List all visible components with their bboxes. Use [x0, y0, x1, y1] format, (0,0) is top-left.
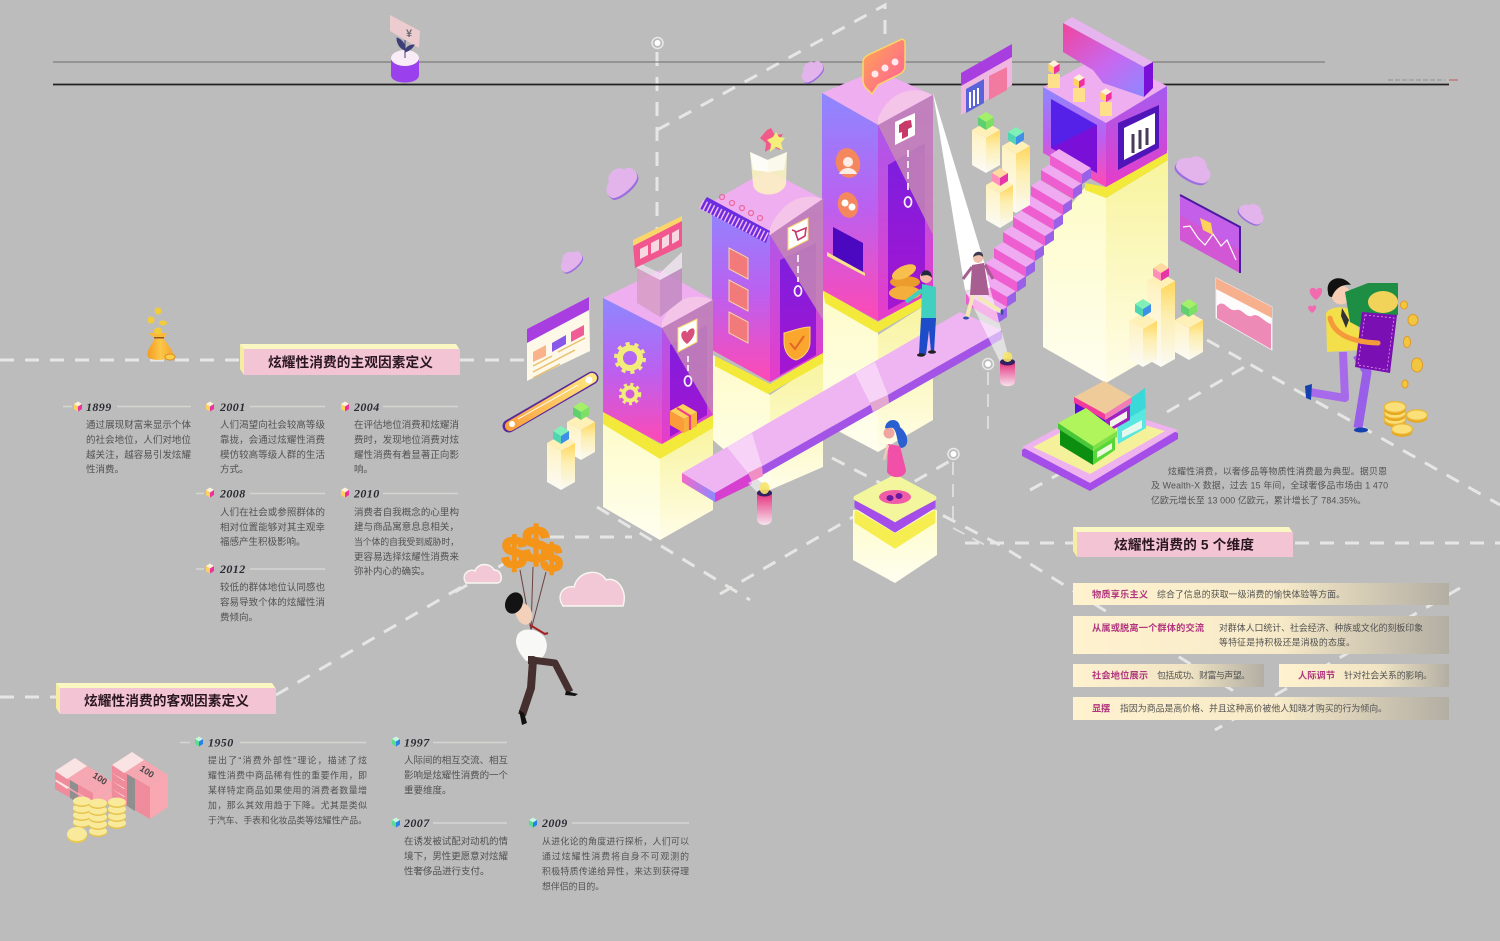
light beams on walkway: [727, 362, 889, 497]
small pillars group lower right: [1129, 263, 1203, 367]
figure: balloon man: [502, 517, 578, 725]
icon: yen plant on cylinder: ¥: [406, 28, 413, 40]
entry 2009: 从进化论的角度进行探析，人们可以: [542, 836, 689, 846]
walkway: [682, 312, 1002, 502]
icon: cart tag: [788, 218, 808, 250]
dimension bar: group communication: 对群体人口统计、社会经济、种族或文化的刻板印象: [1219, 622, 1423, 633]
entry 2004: 2004: [353, 400, 380, 414]
text block: luxury market paragraph: 亿欧元增长至 13 000 亿欧元，累计增长了 784.35%。: [1151, 494, 1366, 506]
entry 2004: [341, 400, 459, 476]
entry 2009: [529, 816, 689, 892]
entry 2001: 靠拢，会通过炫耀性消费: [220, 434, 325, 446]
dimension bar: interpersonal regulation: [1279, 664, 1449, 687]
entry 2009: 想伴侣的目的。: [542, 880, 604, 892]
entry 2009: 积极特质传递给异性，来达到获得理: [542, 866, 689, 876]
text block: luxury market paragraph: 及 Wealth-X 数据，过去 15 年间，全球奢侈品市场由 1 470: [1151, 480, 1388, 490]
entry 2012: 2012: [219, 562, 246, 576]
window with ledge: [827, 227, 865, 276]
icon: shield: [784, 327, 810, 360]
isometric building: tower 2: [699, 128, 823, 382]
entry 1997: 影响是炫耀性消费的一个: [404, 770, 508, 782]
heading: objective factors: [56, 683, 276, 714]
card: dashboard: [961, 44, 1012, 115]
icon: speech bubble: [863, 39, 905, 94]
icon: star cup: [750, 128, 787, 194]
entry 1950: 加，那么其效用趋于下降。尤其是类似: [208, 800, 367, 810]
dimension bar: material hedonism: [1073, 583, 1449, 605]
entry 2001: 方式。: [220, 464, 249, 476]
awning: [699, 194, 770, 243]
text block: luxury market paragraph: [1151, 466, 1388, 506]
falling coins: [1400, 301, 1422, 388]
light beam from lamp: [933, 93, 1010, 362]
dimension bar: group communication: 从属或脱离一个群体的交流: [1092, 622, 1204, 633]
figure: person on stairs: [963, 252, 1004, 320]
small pillars group upper right: [972, 112, 1030, 228]
text block: luxury market paragraph: 炫耀性消费，以奢侈品等物质性消费最为典型。据贝恩: [1168, 466, 1387, 476]
entry 2004: 费时，发现地位消费对炫: [354, 434, 459, 446]
entry 2001: 模仿较高等级人群的生活: [220, 449, 325, 461]
entry 1950: [180, 736, 367, 826]
isometric building: tower 3 plinth: [823, 290, 933, 452]
platform with boxes: [1022, 381, 1178, 491]
small pillars group left: [547, 402, 595, 490]
isometric building: tower 1 plinth: [603, 411, 713, 540]
dollar balloons: $: [502, 529, 526, 578]
dimension bar: showing off: [1073, 697, 1449, 720]
entry 1950: 于汽车、手表和化妆品类等炫耀性产品。: [208, 814, 367, 826]
entry 2012: 费倾向。: [220, 612, 258, 624]
spotlight lamps: [757, 352, 1015, 525]
heading: subjective factors: 炫耀性消费的主观因素定义: [268, 354, 433, 370]
pedestal with girl: [853, 420, 937, 583]
heading: five dimensions: 炫耀性消费的 5 个维度: [1114, 536, 1254, 552]
entry 2007: [392, 816, 508, 878]
entry 2009: 通过炫耀性消费将自身不可观测的: [542, 850, 689, 862]
card: web page: [527, 297, 590, 381]
heart icons: [1308, 288, 1322, 313]
isometric building: tower 2 plinth: [713, 352, 823, 490]
dimension bar: material hedonism: 物质享乐主义: [1092, 588, 1148, 600]
stairs: [966, 149, 1091, 323]
heading: objective factors: 炫耀性消费的客观因素定义: [84, 692, 249, 708]
search bar: [509, 376, 592, 427]
entry 1950: 1950: [208, 736, 234, 750]
header rules: [53, 62, 1458, 84]
entry 2007: 在诱发被试配对动机的情: [404, 836, 508, 848]
icon: green box: [1058, 408, 1117, 465]
icon: yen plant on cylinder: [390, 15, 420, 82]
dashed isometric guide lines: [0, 5, 1500, 730]
icon: cyan box: [1117, 388, 1146, 444]
entry 1997: [392, 736, 508, 796]
entry 2007: 境下，男性更愿意对炫耀: [404, 850, 508, 862]
entry 2010: [341, 486, 459, 578]
dimension bar: status display: 包括成功、财富与声望。: [1157, 670, 1250, 680]
icon: small cubes on roof: [1048, 60, 1112, 116]
icon: money stacks and coins: 100: [91, 770, 109, 787]
icon: three framed panels: [729, 248, 748, 343]
entry 1950: 某样特定商品如果使用的消费者数量增: [208, 784, 367, 796]
entry 2001: 人们渴望向社会较高等级: [220, 419, 325, 431]
entry 1899: 性消费。: [86, 464, 124, 476]
entry 1899: [63, 400, 191, 476]
dimension bar: group communication: 等特征是持积极还是消极的态度。: [1219, 636, 1355, 648]
dimension bar: status display: [1073, 664, 1264, 687]
heading: five dimensions: [1073, 527, 1293, 557]
pink clouds: [464, 564, 624, 606]
entry 2009: 2009: [541, 816, 568, 830]
heading: subjective factors: [240, 344, 460, 375]
entry 2007: 性奢侈品进行支付。: [404, 866, 490, 878]
entry 2001: [206, 400, 325, 476]
dollar balloons: $: [541, 538, 562, 580]
dimension bar: interpersonal regulation: 人际调节: [1298, 670, 1335, 680]
isometric tower 4 plinth: [1043, 150, 1168, 383]
timeline: subjective factors: [63, 400, 459, 624]
dimension bar: showing off: 显摆: [1092, 702, 1110, 714]
entry 1950: 提出了“消费外部性”理论，描述了炫: [208, 754, 367, 766]
figure: man with coins: [889, 261, 936, 357]
entry 1950: 耀性消费中商品稀有性的重要作用，即: [208, 770, 367, 780]
dimension bar: showing off: 指因为商品是高价格、并且这种高价被他人知晓才购买的行为倾向。: [1120, 702, 1387, 714]
isometric tower 4: [1043, 17, 1167, 187]
coin stacks: [1384, 402, 1427, 437]
isometric building: tower 1: [603, 216, 713, 444]
icon: money stacks and coins: 100: [138, 763, 156, 780]
icon: money stacks and coins: [55, 752, 168, 843]
card: purple line chart: [1180, 195, 1240, 273]
icon: money bag: [148, 308, 175, 360]
timeline: objective factors: [180, 736, 689, 892]
entry 2008: 福感产生积极影响。: [220, 536, 306, 548]
hanging pull-cord: [684, 356, 692, 386]
card: area chart: [1216, 278, 1272, 350]
entry 2008: 2008: [219, 486, 246, 500]
entry 2008: [196, 486, 325, 548]
entry 2010: 2010: [353, 486, 380, 500]
entry 2012: [196, 562, 325, 624]
icon: bar chart frame: [1118, 105, 1159, 170]
billboard: [1063, 17, 1153, 97]
entry 2008: 人们在社会或参照群体的: [220, 506, 325, 518]
entry 2010: 消费者自我概念的心里构: [354, 506, 459, 518]
dimension bar: group communication: [1073, 616, 1449, 654]
translucent cube on roof: [637, 252, 682, 317]
dimension bar: status display: 社会地位展示: [1092, 670, 1148, 680]
entry 2010: 更容易选择炫耀性消费来: [354, 551, 459, 563]
isometric building: tower 3: [822, 39, 933, 321]
dimension bar: material hedonism: 综合了信息的获取一级消费的愉快体验等方面。: [1157, 588, 1345, 600]
entry 2012: 较低的群体地位认同感也: [220, 582, 325, 594]
entry 2004: 在评估地位消费和炫耀消: [354, 419, 459, 431]
figure: girl: [884, 420, 907, 477]
icon: gears: [616, 344, 644, 404]
entry 2008: 相对位置能够对其主观幸: [220, 522, 325, 534]
icon: avatar badges: [833, 145, 863, 220]
entry 2001: 2001: [219, 400, 246, 414]
entry 2010: 弥补内心的确实。: [354, 566, 430, 578]
dimension bar: interpersonal regulation: 针对社会关系的影响。: [1344, 670, 1432, 680]
entry 1899: 的社会地位，人们对地位: [86, 434, 191, 446]
decorative lilac clouds: [555, 56, 1268, 276]
icon: gift box: [670, 404, 697, 433]
entry 1899: 1899: [86, 400, 112, 414]
icon: purple box: [1074, 381, 1132, 434]
hanging pull-cord: [904, 150, 912, 207]
entry 2004: 响。: [354, 464, 373, 476]
icon: sign board: [633, 216, 682, 268]
dollar balloons: $: [522, 517, 550, 573]
entry 1899: 越关注，越容易引发炫耀: [86, 449, 191, 461]
entry 2010: 当个体的自我受到威胁时，: [354, 536, 459, 547]
entry 1997: 1997: [404, 736, 430, 750]
entry 2007: 2007: [403, 816, 430, 830]
entry 2010: 建与商品寓意息息相关，: [354, 521, 459, 533]
dollar balloons: [502, 517, 562, 580]
hanging pull-cord: [794, 255, 802, 296]
head: [502, 589, 535, 627]
icon: shirt tag: [895, 113, 915, 145]
figure: man with wallet: [1305, 278, 1427, 437]
icon: heart tag: [678, 319, 697, 352]
entry 1997: 重要维度。: [404, 784, 452, 796]
entry 1899: 通过展现财富来显示个体: [86, 419, 191, 431]
entry 2004: 耀性消费有着显著正向影: [354, 449, 459, 461]
entry 2012: 容易导致个体的炫耀性消: [220, 596, 325, 608]
node markers: [652, 38, 994, 460]
entry 1997: 人际间的相互交流、相互: [404, 754, 508, 766]
